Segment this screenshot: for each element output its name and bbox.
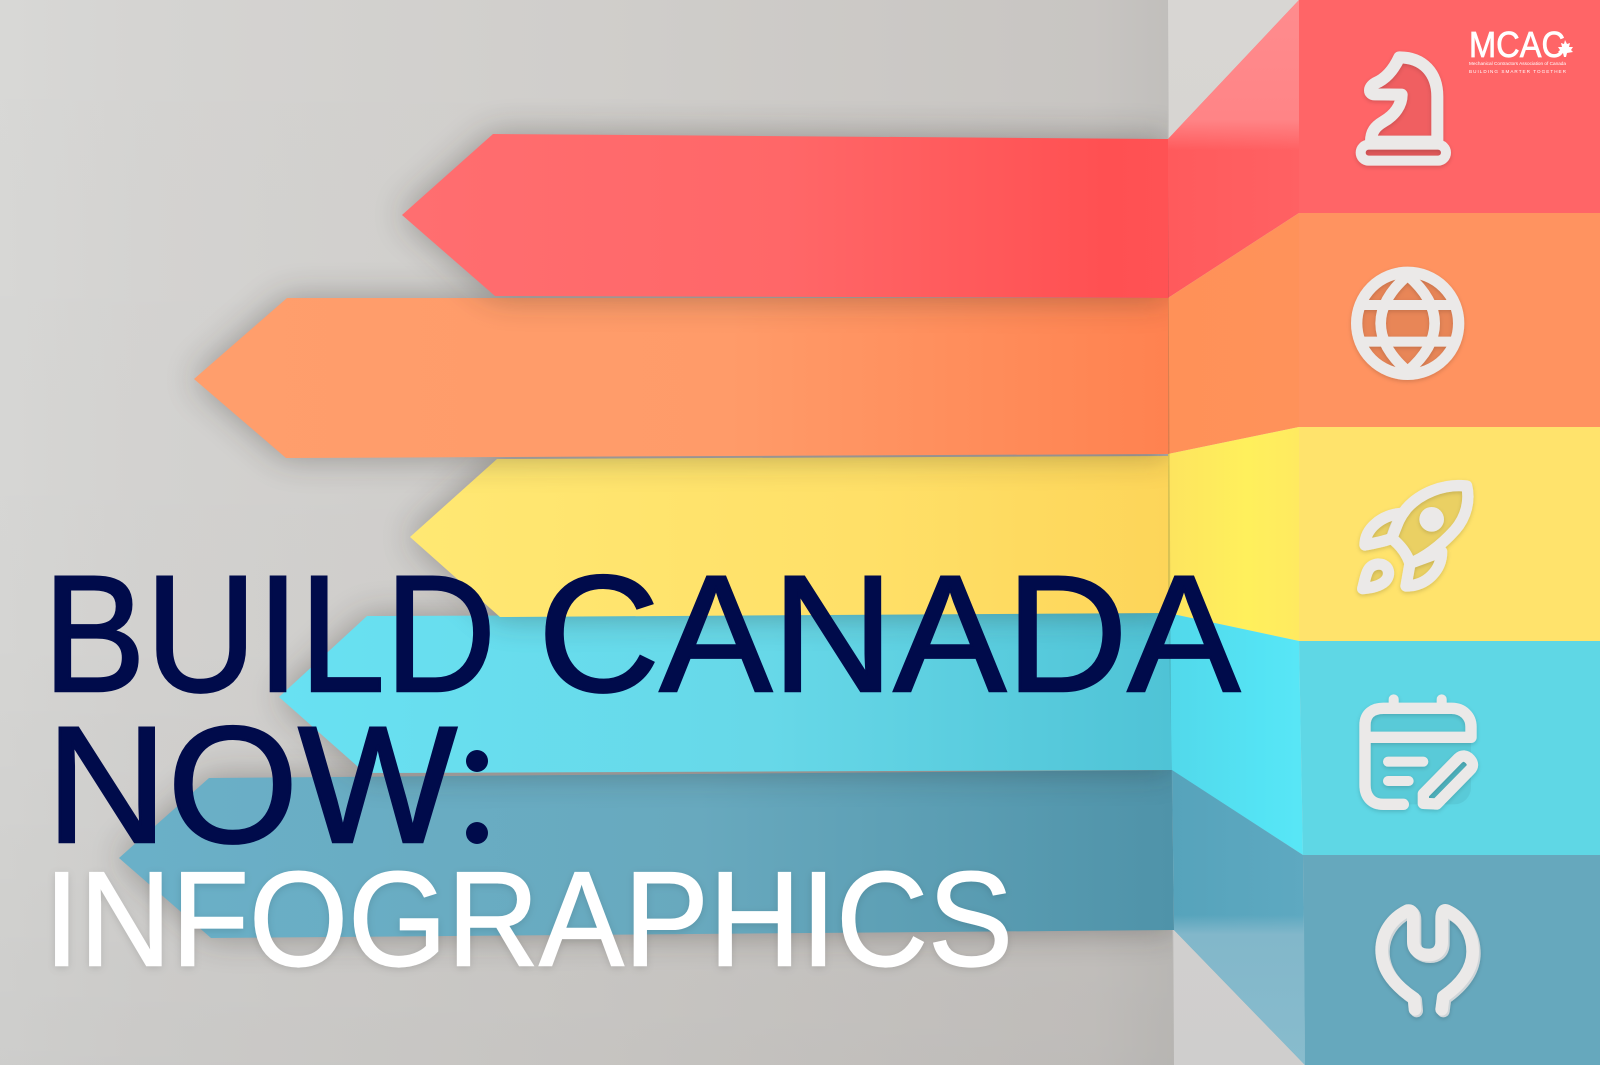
yellow fold [1168, 427, 1299, 641]
title line 1: CANADA [538, 542, 1240, 727]
icon: globe [1357, 272, 1459, 374]
teal fold highlight [1174, 915, 1305, 1065]
cyan panel [1168, 613, 1600, 855]
arrow stack [119, 134, 1174, 938]
red fold highlight [1168, 0, 1299, 150]
logo tagline: Mechanical Contractors Association of Canada [1469, 61, 1566, 66]
cyan arrow [279, 613, 1172, 773]
icon: maple leaf [1558, 40, 1573, 57]
logo: MCAC: MCAC [1469, 24, 1565, 65]
logo tagline [1469, 61, 1567, 74]
yellow panel [1168, 427, 1600, 641]
title line 2: : [461, 694, 507, 879]
title line 1: BUILD [43, 542, 496, 727]
cyan fold [1168, 613, 1303, 855]
title [43, 542, 1240, 994]
logo tagline: BUILDING SMARTER TOGETHER [1469, 69, 1567, 74]
title line 1 [43, 542, 1240, 727]
icon: wrench [1382, 910, 1474, 1011]
icon: rocket [1363, 486, 1468, 589]
red arrow [402, 134, 1168, 298]
title line 2: NOW [46, 693, 457, 878]
subtitle: INFOGRAPHICS [44, 844, 1013, 994]
orange panel [1168, 213, 1600, 454]
orange fold [1168, 213, 1299, 454]
red fold [1168, 0, 1299, 298]
yellow arrow [410, 456, 1168, 617]
orange arrow [194, 298, 1168, 458]
red panel with icon area [1168, 0, 1600, 298]
teal panel [1172, 770, 1600, 1065]
icon: calendar with pencil [1365, 699, 1472, 804]
icon: chess knight [1361, 57, 1446, 161]
teal fold [1172, 770, 1305, 1065]
teal arrow [119, 770, 1174, 938]
